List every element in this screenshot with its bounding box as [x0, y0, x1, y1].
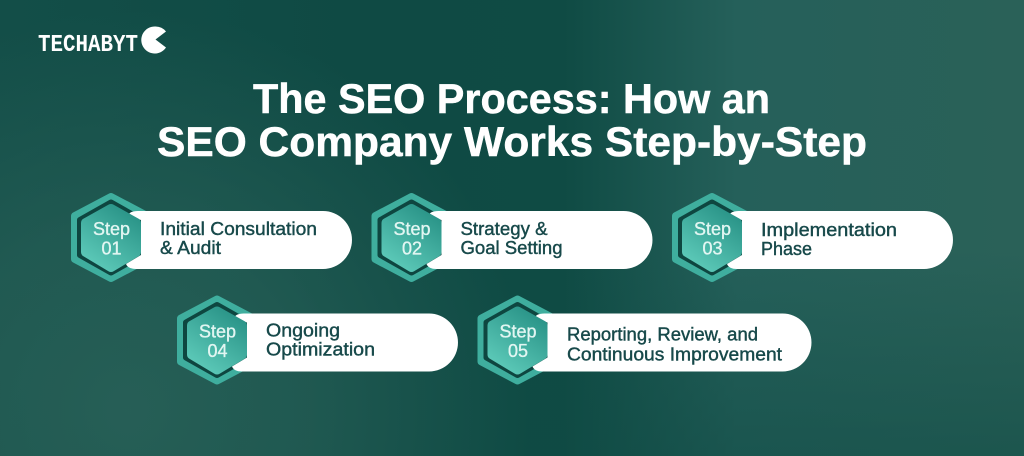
- step 04: 04: [208, 341, 228, 361]
- step 03: Implementation: [761, 220, 897, 240]
- step 02: Strategy &: [460, 219, 548, 239]
- step 03: [676, 197, 953, 278]
- step 02: Step: [394, 219, 430, 239]
- step 05: [482, 300, 811, 380]
- step 01: [75, 197, 352, 278]
- step 05: 05: [508, 341, 528, 361]
- step 04: Ongoing: [266, 320, 340, 340]
- step 02: Goal Setting: [460, 238, 562, 258]
- title: The SEO Process: How an: [253, 75, 770, 122]
- title: SEO Company Works Step-by-Step: [157, 118, 867, 165]
- icon: pac-man shaped letter E: [141, 26, 166, 53]
- step 02: 02: [402, 238, 422, 258]
- step 04: Step: [199, 322, 236, 342]
- step 04: [181, 300, 458, 380]
- logo: Techabyte: TECHABYT: [38, 32, 138, 59]
- step 03: Phase: [761, 239, 812, 259]
- title: [157, 75, 867, 165]
- step 01: & Audit: [160, 238, 221, 258]
- step 03: Step: [694, 219, 731, 239]
- step 01: Initial Consultation: [160, 219, 317, 239]
- step 01: Step: [93, 219, 130, 239]
- step 05: Step: [500, 322, 536, 342]
- step 05: Reporting, Review, and: [567, 324, 758, 344]
- step 02: [376, 197, 652, 278]
- step 01: 01: [102, 238, 122, 258]
- step 03: 03: [702, 238, 722, 258]
- step 04: Optimization: [266, 340, 375, 360]
- step 05: Continuous Improvement: [567, 344, 782, 364]
